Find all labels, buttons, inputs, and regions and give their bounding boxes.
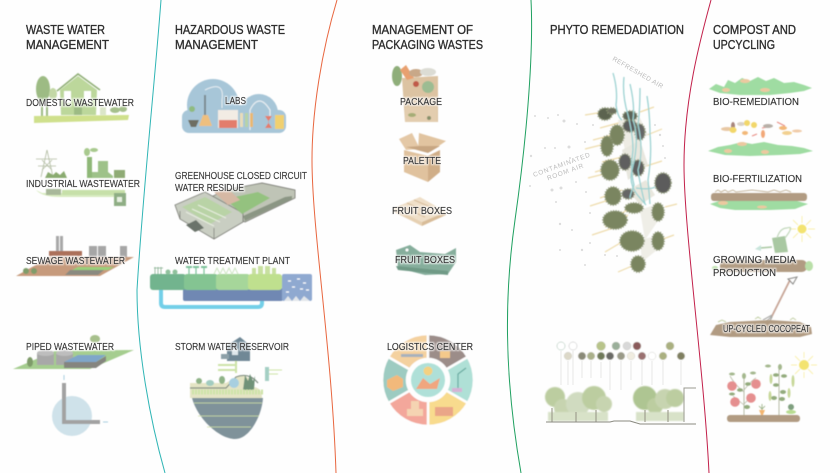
segment: top left	[388, 334, 428, 370]
caption: refreshed air: REFRESHED AIR	[611, 56, 664, 91]
label: bio-fertilization: BIO-FERTILIZATION	[713, 174, 802, 185]
trees	[545, 386, 684, 421]
heading: waste water management: WASTE WATER	[26, 23, 105, 37]
label: piped wastewater: PIPED WASTEWATER	[26, 342, 114, 353]
icon: piped wastewater station	[13, 335, 134, 436]
panel: hazardous waste management	[150, 23, 312, 439]
caption: contaminated room air: ROOM AIR	[546, 162, 585, 182]
divider: crimson curve	[684, 0, 711, 473]
label: palette: PALETTE	[403, 156, 441, 167]
icon: greenhouse isometric	[175, 183, 295, 239]
icon: second sun	[791, 352, 817, 378]
label: greenhouse closed circuit water residue: WATER RESIDUE	[175, 183, 244, 194]
icon: laboratory cloud	[182, 79, 286, 133]
leader lines	[561, 351, 681, 390]
icon: industrial plant	[36, 148, 126, 206]
label: up-cycled cocopeat: UP-CYCLED COCOPEAT	[723, 324, 810, 335]
ground and wall	[546, 421, 696, 424]
foliage	[598, 108, 671, 272]
icon: domestic house	[34, 74, 129, 123]
heading: waste water management: MANAGEMENT	[26, 38, 109, 52]
legend circles	[557, 342, 685, 360]
icon: grass band	[709, 77, 812, 95]
icon: grass band lower	[708, 142, 813, 156]
heading: compost and upcycling: COMPOST AND	[713, 23, 796, 37]
label: logistics center: LOGISTICS CENTER	[387, 342, 473, 353]
label: fruit boxes: FRUIT BOXES	[392, 206, 452, 217]
icon: wooden pallet	[394, 197, 446, 226]
panel: phyto remediation	[529, 23, 696, 424]
hub	[411, 363, 445, 397]
icon: sun	[789, 216, 815, 242]
segment: right	[446, 357, 474, 403]
icon: water treatment plant	[150, 266, 312, 307]
label: greenhouse closed circuit water residue: GREENHOUSE CLOSED CIRCUIT	[175, 171, 307, 182]
chart: contaminant dots	[529, 114, 666, 266]
panel: waste water management	[13, 23, 140, 436]
heading: compost and upcycling	[713, 23, 796, 52]
divider: teal curve	[137, 0, 165, 473]
icon: food package	[392, 65, 438, 122]
icon: organic scraps	[721, 120, 802, 138]
label: sewage wastewater: SEWAGE WASTEWATER	[26, 256, 125, 267]
label: package: PACKAGE	[400, 97, 442, 108]
heading: hazardous waste management: HAZARDOUS WASTE	[175, 23, 285, 37]
panel: compost and upcycling	[708, 23, 817, 422]
heading: hazardous waste management: MANAGEMENT	[175, 38, 258, 52]
heading: management of packaging wastes: PACKAGING WASTES	[372, 38, 483, 52]
caption: contaminated room air: CONTAMINATED	[532, 152, 592, 179]
icon: watering can	[755, 227, 791, 253]
icon: soil over grass	[710, 190, 808, 210]
segment: left	[382, 357, 410, 403]
heading: management of packaging wastes: MANAGEMENT OF	[372, 23, 473, 37]
heading: waste water management	[26, 23, 109, 52]
icon: green crate	[396, 245, 456, 275]
label: fruit boxes crate: FRUIT BOXES	[395, 255, 455, 266]
icon: vegetable plants	[727, 364, 800, 422]
icon: storm water reservoir	[190, 337, 282, 439]
label: growing media production	[713, 255, 796, 279]
divider: orange curve	[312, 0, 337, 473]
yellow air streams	[585, 107, 677, 272]
panel: management of packaging wastes	[372, 23, 483, 426]
segment: top right	[428, 334, 468, 370]
segment: bottom left	[388, 390, 428, 426]
label: domestic wastewater: DOMESTIC WASTEWATER	[26, 98, 134, 109]
cyan airflow lines	[613, 73, 655, 205]
heading: phyto remedadiation: PHYTO REMEDADIATION	[550, 23, 684, 37]
heading: management of packaging wastes	[372, 23, 483, 52]
icon: spade	[763, 277, 797, 323]
icon: sewage works	[16, 236, 134, 276]
label: storm water reservoir: STORM WATER RESERVOIR	[175, 342, 289, 353]
heading: compost and upcycling: UPCYCLING	[713, 38, 775, 52]
divider: green curve	[507, 0, 532, 473]
icon: cardboard box	[399, 133, 446, 182]
label: growing media production: PRODUCTION	[713, 268, 776, 279]
label: growing media production: GROWING MEDIA	[713, 255, 796, 266]
label: labs: LABS	[225, 96, 246, 107]
icon: cocopeat bed	[710, 317, 812, 337]
label: industrial wastewater: INDUSTRIAL WASTEWATER	[26, 179, 140, 190]
label: water treatment plant: WATER TREATMENT PLANT	[175, 256, 290, 267]
white pots	[618, 118, 648, 150]
illustration: street section	[545, 342, 696, 424]
segment: bottom right	[428, 390, 468, 426]
illustration: plant wall	[585, 73, 677, 272]
label: bio-remediation: BIO-REMEDIATION	[713, 97, 799, 108]
heading: hazardous waste management	[175, 23, 285, 52]
label: greenhouse closed circuit water residue	[175, 171, 307, 194]
icon: soil bed	[712, 260, 813, 272]
chart: logistics wheel	[382, 334, 474, 426]
